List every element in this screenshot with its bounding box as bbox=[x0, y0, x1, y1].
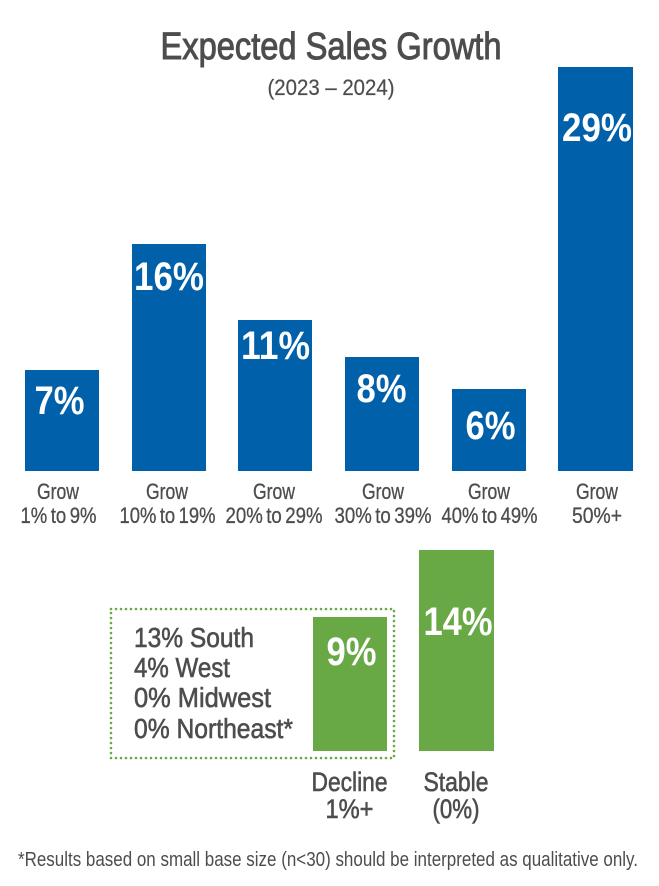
label: grow 40% to 49%: 40% to 49% bbox=[442, 503, 538, 528]
regional breakdown text bbox=[134, 622, 293, 744]
bar: grow 20% to 29%: 11% bbox=[241, 324, 310, 368]
label: grow 1% to 9%: Grow bbox=[37, 479, 79, 504]
bar: grow 10% to 19%: 16% bbox=[134, 255, 204, 299]
label: grow 1% to 9% bbox=[20, 479, 96, 528]
bar: grow 1% to 9%: 7% bbox=[34, 379, 84, 423]
bar: grow 1% to 9% bbox=[25, 370, 99, 471]
label: decline: 1%+ bbox=[326, 794, 374, 824]
label: grow 40% to 49% bbox=[442, 479, 538, 528]
label: decline: Decline bbox=[312, 767, 388, 797]
label: grow 1% to 9%: 1% to 9% bbox=[20, 503, 96, 528]
label: grow 10% to 19%: 10% to 19% bbox=[120, 503, 216, 528]
title: Expected Sales Growth bbox=[160, 26, 502, 68]
label: grow 10% to 19%: Grow bbox=[146, 479, 188, 504]
label: grow 30% to 39% bbox=[334, 479, 432, 528]
label: stable: (0%) bbox=[432, 794, 480, 824]
subtitle: (2023 – 2024) bbox=[268, 75, 394, 100]
bar: stable: 14% bbox=[424, 600, 492, 644]
bar: grow 40% to 49%: 6% bbox=[466, 404, 516, 448]
label: grow 30% to 39%: Grow bbox=[362, 479, 404, 504]
regional breakdown text: 0% Northeast* bbox=[134, 713, 293, 744]
label: grow 20% to 29%: Grow bbox=[253, 479, 295, 504]
bar: grow 30% to 39% bbox=[345, 357, 419, 471]
bar: grow 40% to 49% bbox=[452, 389, 526, 471]
label: grow 50%+ bbox=[572, 479, 622, 528]
label: grow 20% to 29%: 20% to 29% bbox=[226, 503, 322, 528]
label: stable bbox=[424, 767, 488, 824]
label: grow 20% to 29% bbox=[226, 479, 322, 528]
bar: grow 20% to 29% bbox=[238, 320, 312, 471]
label: grow 30% to 39%: 30% to 39% bbox=[334, 503, 432, 528]
label: stable: Stable bbox=[424, 767, 488, 797]
label: grow 10% to 19% bbox=[120, 479, 216, 528]
regional breakdown text: 0% Midwest bbox=[134, 682, 271, 713]
regional breakdown text: 13% South bbox=[134, 622, 254, 653]
regional breakdown dotted box bbox=[111, 609, 394, 758]
label: decline bbox=[312, 767, 388, 824]
label: grow 50%+: Grow bbox=[576, 479, 618, 504]
label: grow 40% to 49%: Grow bbox=[468, 479, 510, 504]
bar: grow 50%+ bbox=[558, 67, 633, 471]
bar: decline: 9% bbox=[326, 630, 376, 674]
regional breakdown text: 4% West bbox=[134, 652, 230, 683]
label: grow 50%+: 50%+ bbox=[572, 503, 622, 528]
bar: grow 10% to 19% bbox=[132, 244, 206, 471]
bar: grow 30% to 39%: 8% bbox=[356, 367, 406, 411]
bar: decline bbox=[313, 617, 387, 751]
bar: grow 50%+: 29% bbox=[562, 106, 632, 150]
bar: stable bbox=[419, 550, 494, 751]
